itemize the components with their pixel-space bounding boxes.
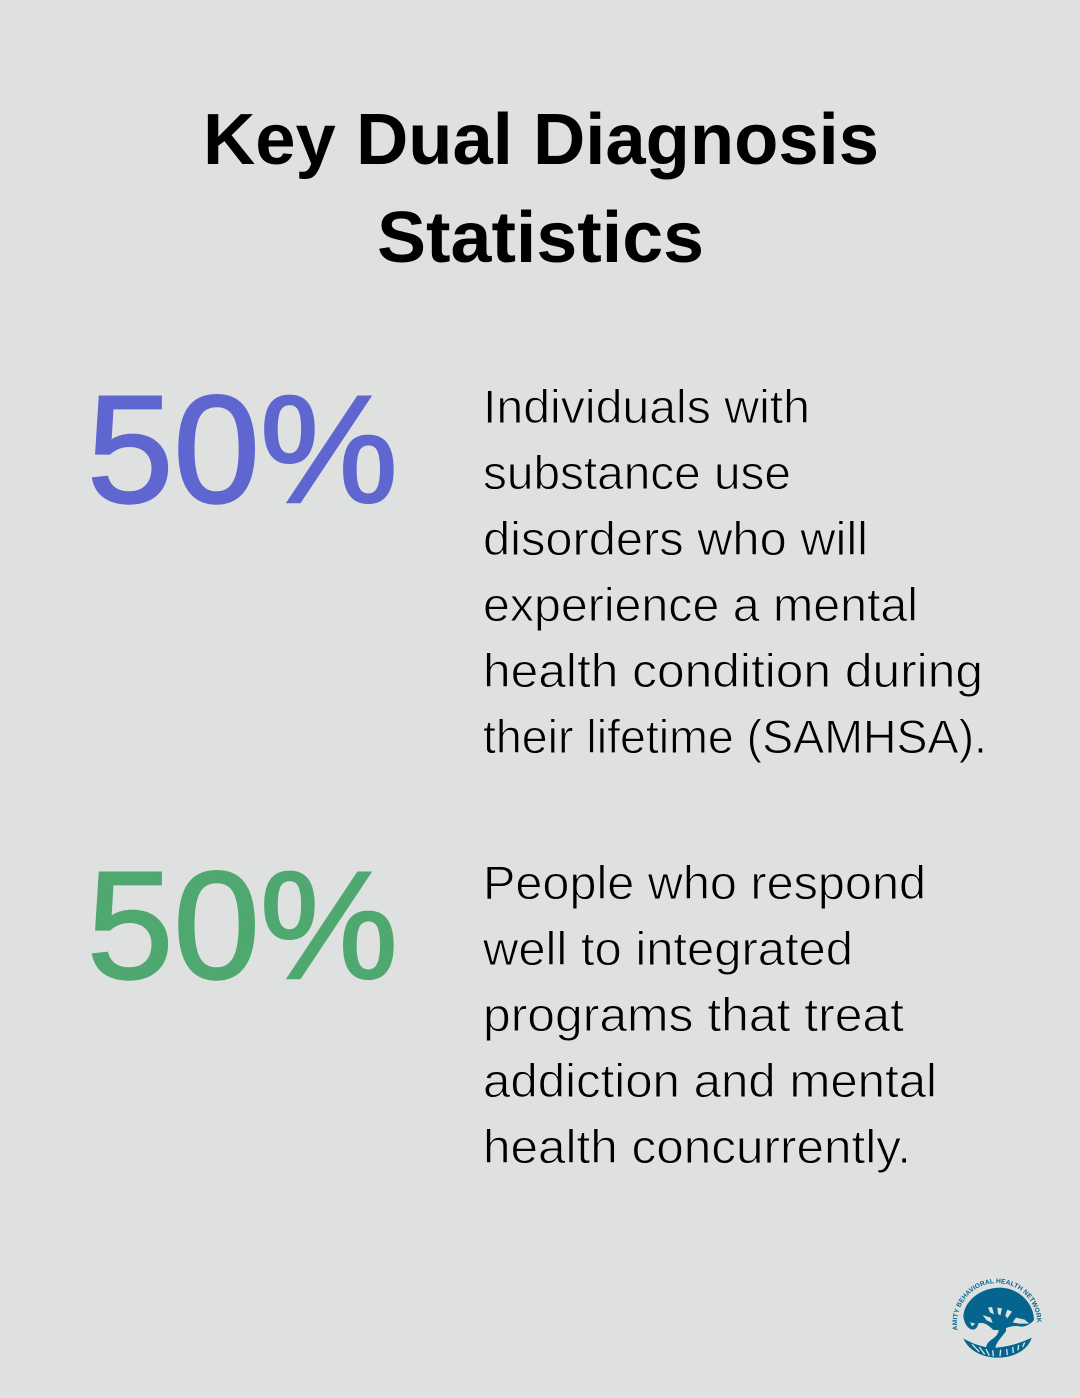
title: Statistics — [377, 198, 704, 278]
text block: integrated programs: addiction and mental — [483, 1054, 937, 1107]
stat: 50% blue: 50% — [87, 364, 398, 535]
tree trunk — [986, 1324, 1006, 1350]
text block: substance use disorders: disorders who will — [483, 512, 868, 565]
text block: integrated programs: programs that treat — [483, 988, 904, 1041]
light gaps between branches — [970, 1307, 1029, 1326]
text block: substance use disorders: their lifetime (SAMHSA). — [483, 710, 987, 763]
title: Key Dual Diagnosis — [203, 100, 879, 180]
tree canopy — [963, 1288, 1034, 1330]
icon: Amity Behavioral Health Network logo — [952, 1278, 1042, 1358]
text block: substance use disorders — [483, 380, 987, 763]
text block: substance use disorders: substance use — [483, 446, 791, 499]
roots — [963, 1338, 1032, 1358]
text block: integrated programs: People who respond — [483, 856, 926, 909]
text block: substance use disorders: Individuals with — [483, 380, 810, 433]
title — [203, 100, 879, 278]
text block: integrated programs — [482, 856, 937, 1173]
text block: substance use disorders: experience a mental — [483, 578, 918, 631]
text block: integrated programs: health concurrently. — [483, 1120, 911, 1173]
icon: Amity Behavioral Health Network logo: AMITY BEHAVIORAL HEALTH NETWORK — [952, 1278, 1042, 1330]
text block: integrated programs: well to integrated — [482, 922, 853, 975]
text block: substance use disorders: health condition during — [483, 644, 983, 697]
stat: 50% green: 50% — [87, 840, 398, 1011]
